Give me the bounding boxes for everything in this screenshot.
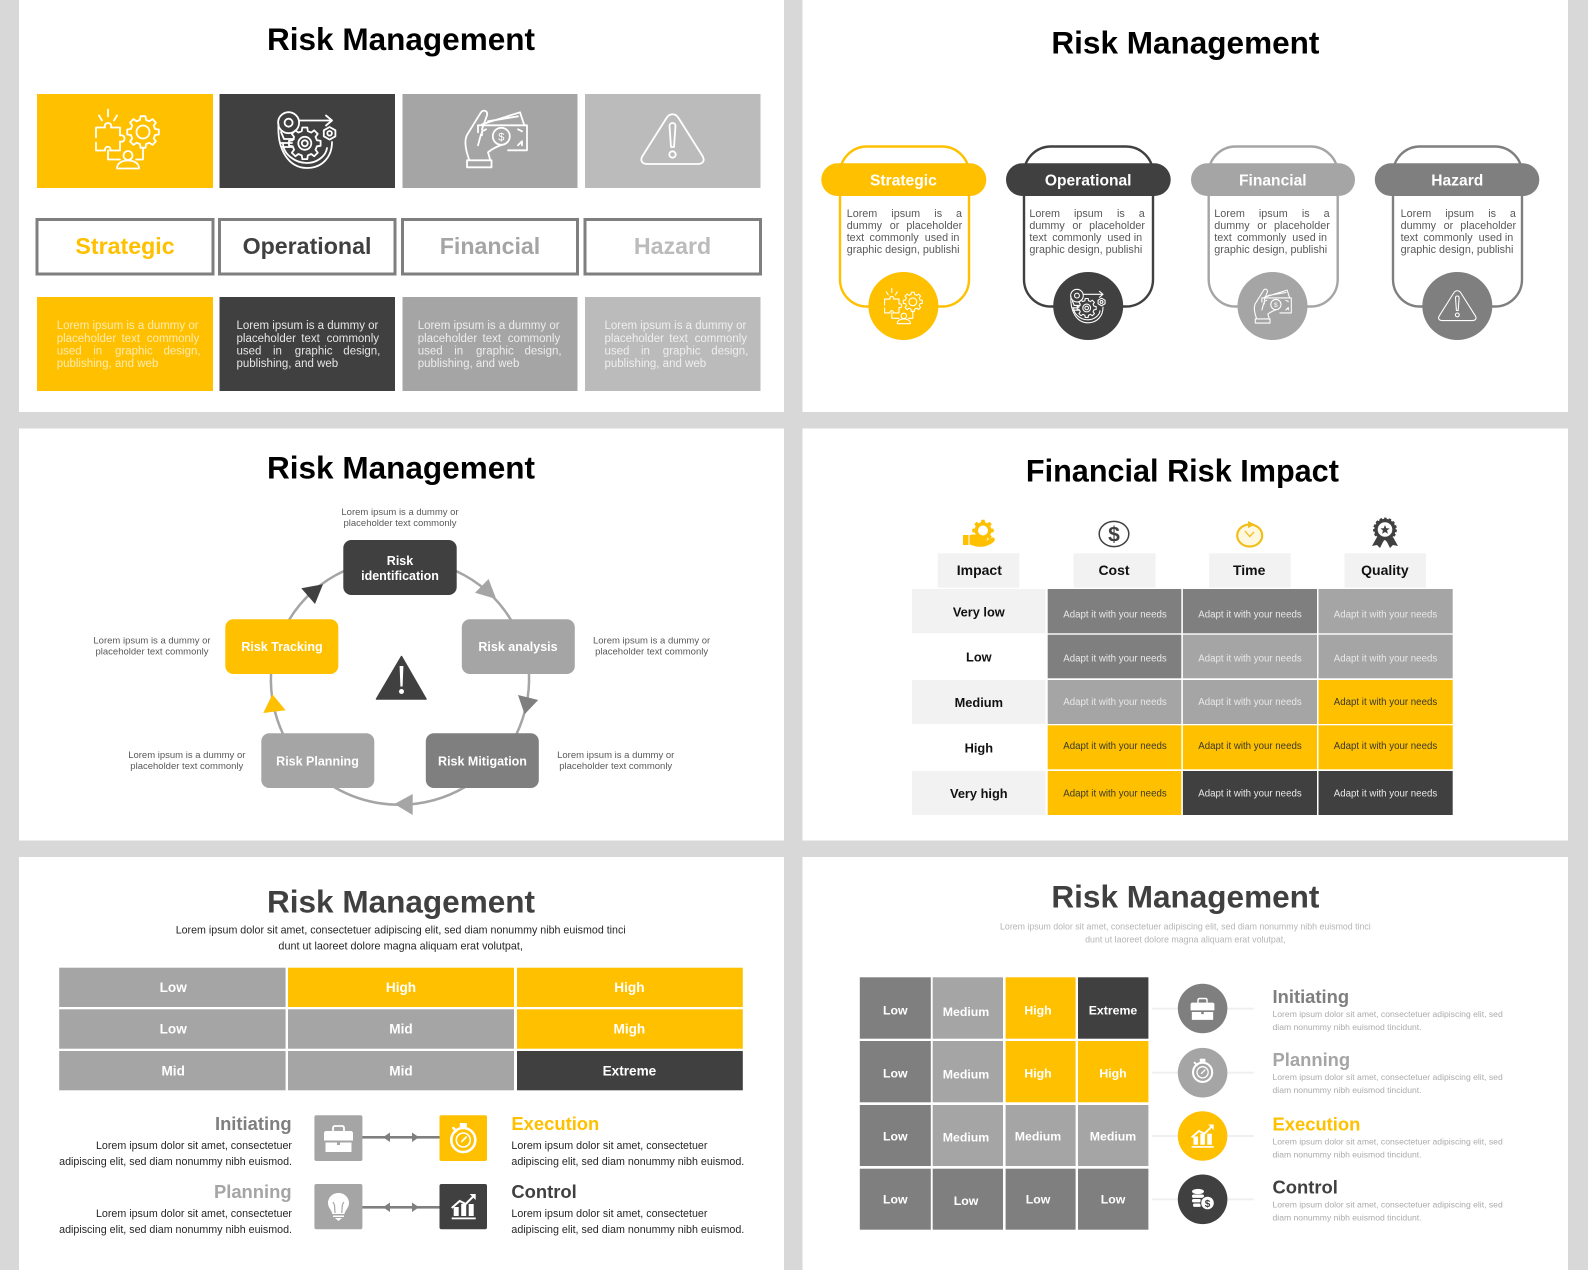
arrow: tracking to identification bbox=[301, 584, 323, 604]
icon block: financial bbox=[402, 94, 578, 188]
label box: operational bbox=[220, 220, 395, 274]
icon block: operational bbox=[220, 94, 395, 188]
row: low: Adapt it with your needs bbox=[1063, 654, 1167, 664]
phase: execution: Execution bbox=[1272, 1113, 1360, 1134]
subtitle bbox=[1000, 922, 1371, 944]
node: risk identification: Risk bbox=[387, 554, 413, 568]
card: hazard: in bbox=[1505, 232, 1513, 244]
card: operational: ipsum bbox=[1074, 208, 1103, 220]
row: medium: Adapt it with your needs bbox=[1198, 697, 1302, 708]
phase: initiating bbox=[59, 1113, 292, 1168]
row: medium: Adapt it with your needs bbox=[1334, 697, 1437, 708]
phase: control: adipiscing elit, sed diam nonummy nibh euismod. bbox=[511, 1224, 744, 1236]
phase: planning: Lorem ipsum dolor sit amet, consectetuer bbox=[96, 1208, 292, 1220]
card: strategic: a bbox=[956, 208, 962, 220]
card: operational: in bbox=[1134, 232, 1142, 244]
risk matrix: Low bbox=[883, 1193, 908, 1207]
note: mitigation: Lorem ipsum is a dummy or bbox=[557, 750, 674, 761]
card: hazard: ipsum bbox=[1445, 208, 1474, 220]
text block: operational: text bbox=[301, 333, 321, 345]
card: operational: commonly bbox=[1052, 232, 1102, 244]
phase: control bbox=[1272, 1176, 1503, 1222]
text block: strategic: used bbox=[57, 346, 82, 358]
text block: operational: in bbox=[273, 346, 282, 358]
row: low: Adapt it with your needs bbox=[1198, 654, 1302, 664]
icon tile: growth chart bbox=[440, 1184, 487, 1229]
label box: strategic bbox=[37, 220, 213, 274]
subtitle bbox=[176, 924, 626, 952]
text block: operational: graphic bbox=[295, 346, 333, 358]
phase: execution: Lorem ipsum dolor sit amet, consectetuer bbox=[511, 1140, 708, 1152]
card: strategic: ipsum bbox=[891, 208, 920, 220]
card: financial: ipsum bbox=[1259, 208, 1288, 220]
phase: control: diam nonummy nibh euismod tincidunt. bbox=[1272, 1212, 1422, 1222]
risk grid bbox=[59, 968, 743, 1090]
card: operational: text bbox=[1029, 232, 1047, 244]
phase: execution bbox=[1272, 1113, 1503, 1159]
note: tracking: Lorem ipsum is a dummy or bbox=[93, 636, 211, 646]
phase: control: Lorem ipsum dolor sit amet, consectetuer bbox=[511, 1208, 708, 1220]
card: hazard: commonly bbox=[1423, 232, 1473, 244]
text block: financial: text bbox=[482, 333, 502, 345]
subtitle: Lorem ipsum dolor sit amet, consectetuer adipiscing elit, sed diam nonummy nibh euismod tinci bbox=[176, 924, 626, 936]
node: risk tracking bbox=[225, 619, 338, 674]
row: low: Low bbox=[966, 650, 992, 664]
text block: strategic: graphic bbox=[115, 346, 153, 358]
risk grid: Extreme bbox=[603, 1063, 657, 1078]
node: risk mitigation: Risk Mitigation bbox=[438, 754, 527, 768]
card: strategic: text bbox=[847, 232, 864, 244]
risk matrix: High bbox=[1024, 1067, 1052, 1081]
risk matrix: Medium bbox=[1090, 1130, 1136, 1144]
text block: strategic: commonly bbox=[147, 333, 199, 345]
risk matrix: Low bbox=[1101, 1193, 1126, 1207]
cycle ring bbox=[271, 571, 529, 805]
text block: strategic bbox=[37, 297, 213, 391]
phase: planning: Lorem ipsum dolor sit amet, consectetuer adipiscing elit, sed bbox=[1272, 1072, 1503, 1082]
icon: dollar coin bbox=[1099, 521, 1129, 547]
icon: dollar coin: $ bbox=[1108, 524, 1120, 546]
text block: operational bbox=[220, 297, 395, 391]
phase: planning: adipiscing elit, sed diam nonummy nibh euismod. bbox=[59, 1224, 292, 1236]
note: analysis: Lorem ipsum is a dummy or bbox=[593, 636, 710, 646]
title: Financial Risk Impact bbox=[1026, 453, 1339, 489]
column header: Cost bbox=[1074, 553, 1156, 588]
panel: financial risk impact table bbox=[802, 428, 1568, 840]
label box: financial: Financial bbox=[440, 233, 540, 259]
card: strategic bbox=[821, 146, 986, 340]
panel: risk level grid with phases bbox=[19, 857, 784, 1270]
text block: hazard: placeholder bbox=[604, 333, 664, 345]
card: strategic: commonly bbox=[870, 232, 919, 244]
text block: financial: Lorem ipsum is a dummy or bbox=[418, 320, 560, 332]
phase: initiating bbox=[1272, 986, 1503, 1032]
text block: hazard: publishing, and web bbox=[604, 358, 706, 370]
card: operational: is bbox=[1117, 208, 1125, 220]
text block: hazard: graphic bbox=[663, 346, 701, 358]
card: operational: placeholder bbox=[1089, 220, 1145, 232]
text block: financial: graphic bbox=[476, 346, 514, 358]
title: Risk Management bbox=[1051, 24, 1320, 60]
column header: Impact bbox=[938, 553, 1019, 588]
phase: control: Lorem ipsum dolor sit amet, consectetuer adipiscing elit, sed bbox=[1272, 1199, 1503, 1209]
text block: financial bbox=[402, 297, 578, 391]
card: financial: dummy bbox=[1214, 220, 1250, 232]
panel: risk cycle diagram bbox=[19, 428, 784, 840]
icon tile: briefcase bbox=[314, 1115, 362, 1161]
card: strategic: Strategic bbox=[870, 173, 937, 190]
note: tracking: placeholder text commonly bbox=[96, 646, 209, 658]
arrow: mitigation to planning bbox=[394, 794, 413, 815]
phase: execution bbox=[511, 1113, 744, 1168]
column header: Time: Time bbox=[1233, 562, 1266, 578]
text block: financial: in bbox=[454, 346, 463, 358]
risk grid: High bbox=[614, 980, 645, 995]
phase: initiating: adipiscing elit, sed diam nonummy nibh euismod. bbox=[59, 1156, 292, 1168]
risk grid: Mid bbox=[161, 1063, 185, 1078]
card: strategic: placeholder bbox=[906, 220, 963, 232]
node: risk planning: Risk Planning bbox=[276, 754, 359, 768]
text block: operational: publishing, and web bbox=[236, 358, 338, 370]
marker: coins: $ bbox=[1205, 1199, 1211, 1210]
row: medium bbox=[912, 680, 1453, 724]
note: analysis: placeholder text commonly bbox=[595, 646, 708, 658]
risk grid: Mid bbox=[389, 1022, 413, 1037]
row: very high: Adapt it with your needs bbox=[1063, 788, 1167, 800]
node: risk analysis: Risk analysis bbox=[478, 640, 558, 654]
panel: risk matrix with phases bbox=[802, 857, 1568, 1270]
card: operational: used bbox=[1107, 232, 1131, 244]
text block: hazard bbox=[585, 297, 760, 391]
risk matrix: Medium bbox=[943, 1005, 989, 1019]
arrow: planning to tracking bbox=[263, 694, 286, 713]
row: very low: Adapt it with your needs bbox=[1334, 610, 1437, 620]
arrow: identification to analysis bbox=[475, 579, 496, 599]
card: financial: used bbox=[1292, 232, 1316, 244]
row: very low: Very low bbox=[953, 604, 1005, 619]
card: hazard: a bbox=[1510, 208, 1516, 220]
card: financial: commonly bbox=[1237, 232, 1287, 244]
phase: execution: Execution bbox=[511, 1113, 599, 1134]
card: financial: graphic design, publishi bbox=[1214, 244, 1327, 256]
card: financial: or bbox=[1257, 220, 1267, 232]
text block: strategic: Lorem ipsum is a dummy or bbox=[57, 320, 199, 332]
row: low: Adapt it with your needs bbox=[1334, 654, 1437, 664]
phase: planning bbox=[1272, 1049, 1503, 1095]
risk matrix: Low bbox=[883, 1004, 908, 1018]
label box: financial bbox=[402, 220, 578, 274]
column header: Quality: Quality bbox=[1361, 562, 1409, 578]
row: low bbox=[966, 635, 1453, 678]
risk grid: Migh bbox=[614, 1022, 645, 1037]
row: very low bbox=[912, 589, 1453, 633]
icon: warning triangle bbox=[376, 656, 426, 699]
node: risk planning bbox=[261, 733, 374, 788]
card: financial: placeholder bbox=[1274, 220, 1330, 232]
phase: initiating: Lorem ipsum dolor sit amet, consectetuer bbox=[96, 1140, 292, 1152]
label box: strategic: Strategic bbox=[75, 233, 175, 259]
risk matrix: High bbox=[1099, 1067, 1127, 1081]
card: strategic: dummy bbox=[847, 220, 883, 232]
text block: hazard: used bbox=[604, 346, 629, 358]
risk matrix: High bbox=[1024, 1004, 1052, 1018]
row: medium: Adapt it with your needs bbox=[1063, 697, 1167, 708]
phase: initiating: diam nonummy nibh euismod tincidunt. bbox=[1272, 1022, 1422, 1032]
phase: initiating: Initiating bbox=[215, 1113, 292, 1134]
risk grid: Low bbox=[160, 1022, 187, 1037]
risk matrix: Medium bbox=[943, 1131, 989, 1145]
card: hazard: dummy bbox=[1401, 220, 1437, 232]
card: operational: a bbox=[1139, 208, 1145, 220]
column header: Impact: Impact bbox=[957, 562, 1002, 578]
text block: financial: placeholder bbox=[418, 333, 477, 345]
card: operational: Operational bbox=[1045, 173, 1132, 190]
note: planning: placeholder text commonly bbox=[130, 761, 244, 772]
row: high: Adapt it with your needs bbox=[1198, 741, 1302, 752]
phase: initiating: Initiating bbox=[1272, 986, 1349, 1007]
card: hazard: used bbox=[1479, 232, 1502, 244]
node: risk tracking: Risk Tracking bbox=[241, 640, 323, 654]
text block: operational: placeholder bbox=[236, 333, 296, 345]
subtitle: Lorem ipsum dolor sit amet, consectetuer adipiscing elit, sed diam nonummy nibh euismod tinci bbox=[1000, 922, 1371, 932]
text block: operational: commonly bbox=[327, 333, 379, 345]
row: very high: Very high bbox=[950, 786, 1008, 801]
card: hazard: is bbox=[1488, 208, 1497, 220]
card: financial: in bbox=[1319, 232, 1327, 244]
card: financial: is bbox=[1302, 208, 1310, 220]
icon: quality medal bbox=[1372, 518, 1398, 548]
risk matrix: Medium bbox=[1015, 1130, 1061, 1144]
card: hazard: text bbox=[1401, 232, 1418, 244]
card: financial: text bbox=[1214, 232, 1232, 244]
risk matrix: Extreme bbox=[1089, 1004, 1137, 1018]
card: strategic: in bbox=[951, 232, 959, 244]
icon tile: stopwatch bbox=[440, 1115, 487, 1161]
card: operational: Lorem bbox=[1029, 208, 1060, 220]
text block: hazard: in bbox=[641, 346, 650, 358]
risk grid: Low bbox=[160, 980, 187, 995]
column header: Time bbox=[1209, 553, 1291, 588]
icon tile: light bulb bbox=[314, 1184, 362, 1229]
phase: execution: adipiscing elit, sed diam nonummy nibh euismod. bbox=[511, 1156, 744, 1168]
text block: operational: Lorem ipsum is a dummy or bbox=[236, 320, 379, 332]
icon: clock with arrow bbox=[1237, 521, 1262, 546]
phase: planning: Planning bbox=[1272, 1049, 1350, 1070]
phase: execution: diam nonummy nibh euismod tincidunt. bbox=[1272, 1149, 1422, 1159]
note: identification: placeholder text commonly bbox=[344, 518, 457, 529]
card: operational: or bbox=[1072, 220, 1082, 232]
card: hazard: Hazard bbox=[1431, 173, 1483, 190]
risk grid: Mid bbox=[389, 1063, 413, 1078]
node: risk identification bbox=[343, 540, 457, 595]
marker: chart bbox=[1152, 1111, 1254, 1161]
marker: briefcase bbox=[1152, 984, 1254, 1033]
title: Risk Management bbox=[267, 883, 536, 919]
text block: hazard: commonly bbox=[695, 333, 747, 345]
row: very high: Adapt it with your needs bbox=[1334, 788, 1437, 800]
card: strategic: graphic design, publishi bbox=[847, 244, 960, 256]
panel: risk category cards bbox=[802, 0, 1568, 412]
card: strategic: or bbox=[890, 220, 900, 232]
panel: strategic categories blocks bbox=[19, 0, 784, 412]
card: operational: dummy bbox=[1029, 220, 1065, 232]
connector: planning to control bbox=[362, 1202, 440, 1212]
row: high: High bbox=[965, 740, 993, 755]
marker: stopwatch bbox=[1152, 1048, 1254, 1097]
phase: planning: diam nonummy nibh euismod tincidunt. bbox=[1272, 1085, 1422, 1095]
marker: coins bbox=[1152, 1174, 1254, 1224]
row: high: Adapt it with your needs bbox=[1334, 741, 1437, 752]
phase: initiating: Lorem ipsum dolor sit amet, consectetuer adipiscing elit, sed bbox=[1272, 1009, 1503, 1019]
subtitle: dunt ut laoreet dolore magna aliquam erat volutpat, bbox=[278, 940, 523, 952]
risk matrix: Low bbox=[954, 1194, 979, 1208]
risk matrix: Low bbox=[1026, 1193, 1051, 1207]
text block: financial: publishing, and web bbox=[418, 358, 519, 370]
text block: strategic: text bbox=[122, 333, 141, 345]
note: planning: Lorem ipsum is a dummy or bbox=[128, 750, 245, 761]
card: hazard bbox=[1375, 146, 1539, 340]
risk matrix bbox=[860, 977, 1148, 1230]
icon block: hazard bbox=[585, 94, 760, 188]
connector: initiating to execution bbox=[362, 1132, 440, 1142]
row: very high bbox=[912, 771, 1453, 815]
text block: hazard: text bbox=[669, 333, 689, 345]
card: financial: Financial bbox=[1239, 173, 1307, 190]
row: high bbox=[965, 725, 1453, 769]
label box: operational: Operational bbox=[243, 233, 371, 259]
card: hazard: placeholder bbox=[1460, 220, 1517, 232]
node: risk analysis bbox=[462, 619, 575, 674]
row: very high: Adapt it with your needs bbox=[1198, 788, 1302, 800]
text block: hazard: Lorem ipsum is a dummy or bbox=[604, 320, 747, 332]
card: strategic: used bbox=[925, 232, 948, 244]
card: financial: Lorem bbox=[1214, 208, 1245, 220]
title: Risk Management bbox=[1051, 878, 1320, 914]
risk grid: High bbox=[386, 980, 416, 995]
phase: control bbox=[511, 1181, 744, 1236]
card: financial: a bbox=[1324, 208, 1330, 220]
phase: execution: Lorem ipsum dolor sit amet, consectetuer adipiscing elit, sed bbox=[1272, 1136, 1503, 1146]
label box: hazard bbox=[585, 220, 760, 274]
card: hazard: Lorem bbox=[1401, 208, 1431, 220]
icon block: strategic bbox=[37, 94, 213, 188]
text block: strategic: publishing, and web bbox=[57, 358, 158, 370]
risk matrix: Medium bbox=[943, 1068, 989, 1082]
subtitle: dunt ut laoreet dolore magna aliquam erat volutpat, bbox=[1085, 934, 1286, 944]
text block: strategic: design, bbox=[164, 346, 201, 358]
column header: Cost: Cost bbox=[1098, 562, 1130, 578]
card: hazard: graphic design, publishi bbox=[1401, 244, 1513, 256]
card: operational: graphic design, publishi bbox=[1029, 244, 1142, 256]
risk matrix: Low bbox=[883, 1130, 908, 1144]
node: risk mitigation bbox=[426, 733, 539, 788]
phase: control: Control bbox=[1272, 1176, 1338, 1197]
text block: hazard: design, bbox=[711, 346, 748, 358]
note: mitigation: placeholder text commonly bbox=[559, 761, 672, 772]
text block: financial: design, bbox=[524, 346, 562, 358]
icon: hand with gear bbox=[963, 520, 995, 547]
card: strategic: Lorem bbox=[847, 208, 877, 220]
row: very low: Adapt it with your needs bbox=[1063, 610, 1167, 620]
text block: operational: design, bbox=[343, 346, 380, 358]
card: operational bbox=[1006, 146, 1171, 340]
risk matrix: Low bbox=[883, 1067, 908, 1081]
label box: hazard: Hazard bbox=[634, 233, 711, 259]
text block: operational: used bbox=[236, 346, 261, 358]
text block: strategic: in bbox=[93, 346, 102, 358]
column header: Quality bbox=[1344, 553, 1426, 588]
text block: financial: used bbox=[418, 346, 443, 358]
phase: planning bbox=[59, 1181, 292, 1236]
title: Risk Management bbox=[267, 450, 536, 486]
note: identification: Lorem ipsum is a dummy or bbox=[341, 507, 459, 518]
card: financial bbox=[1191, 146, 1355, 340]
arrow: analysis to mitigation bbox=[518, 695, 538, 714]
text block: financial: commonly bbox=[508, 333, 560, 345]
title: Risk Management bbox=[267, 21, 536, 57]
card: strategic: is bbox=[934, 208, 943, 220]
row: high: Adapt it with your needs bbox=[1063, 741, 1167, 752]
row: very low: Adapt it with your needs bbox=[1198, 610, 1302, 620]
row: medium: Medium bbox=[955, 695, 1003, 710]
phase: control: Control bbox=[511, 1181, 577, 1202]
text block: strategic: placeholder bbox=[57, 333, 116, 345]
card: hazard: or bbox=[1444, 220, 1454, 232]
node: risk identification: identification bbox=[361, 569, 439, 583]
phase: planning: Planning bbox=[214, 1181, 292, 1202]
